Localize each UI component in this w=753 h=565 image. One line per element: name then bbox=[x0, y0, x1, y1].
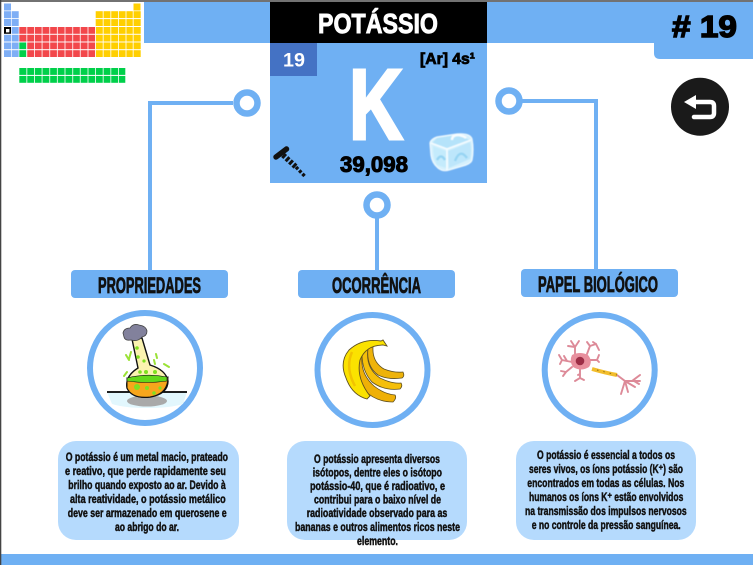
atomic number bbox=[270, 43, 317, 76]
heading: papel biologico bbox=[521, 269, 678, 297]
icon: reacting flask bbox=[90, 313, 200, 423]
description: papel biologico: na transmissão dos impulsos nervosos bbox=[525, 506, 687, 518]
description: papel biologico: O potássio é essencial a todos os bbox=[537, 450, 675, 462]
icon: bananas bbox=[318, 315, 428, 425]
description: papel biologico: e no controle da pressão sanguínea. bbox=[532, 520, 681, 532]
icon: neuron bbox=[545, 315, 655, 425]
description: ocorrencia: potássio-40, que é radioativo, e bbox=[310, 481, 445, 493]
heading: propriedades: PROPRIEDADES bbox=[98, 273, 201, 298]
atomic number: 19 bbox=[283, 50, 305, 72]
description: propriedades: deve ser armazenado em querosene e bbox=[68, 508, 227, 520]
description: propriedades: brilho quando exposto ao ar. Devido à bbox=[68, 480, 226, 492]
back button bbox=[671, 78, 729, 136]
description: papel biologico: seres vivos, os íons potássio (K⁺) são bbox=[529, 464, 683, 476]
connector: ocorrencia bbox=[366, 194, 388, 272]
panel: papel biologico bbox=[516, 269, 696, 540]
description: ocorrencia: radioatividade observado para as bbox=[307, 508, 447, 520]
description: ocorrencia: bananas e outros alimentos ricos neste bbox=[295, 522, 460, 534]
description: propriedades: alta reatividade, o potássio metálico bbox=[70, 494, 226, 506]
description: ocorrencia: elemento. bbox=[357, 536, 398, 548]
description: ocorrencia: isótopos, dentre eles o isótopo bbox=[313, 468, 442, 480]
heading: papel biologico: PAPEL BIOLÓGICO bbox=[538, 272, 658, 297]
panel: ocorrencia bbox=[287, 270, 467, 548]
icon: solid state screw bbox=[276, 149, 306, 177]
footer band bbox=[0, 554, 753, 565]
periodic table locator bbox=[4, 4, 141, 83]
heading: propriedades bbox=[71, 270, 228, 298]
heading: ocorrencia bbox=[298, 270, 455, 298]
description: papel biologico: humanos os íons K⁺ estão envolvidos bbox=[529, 492, 683, 504]
title bbox=[270, 2, 487, 43]
heading: ocorrencia: OCORRÊNCIA bbox=[332, 273, 421, 298]
atomic mass: 39,098 bbox=[340, 152, 408, 177]
header band bbox=[144, 2, 753, 43]
electron configuration: [Ar] 4s¹ bbox=[420, 51, 475, 68]
description: ocorrencia bbox=[287, 441, 467, 548]
connector: propriedades bbox=[150, 92, 258, 272]
description: ocorrencia: O potássio apresenta diversos bbox=[314, 454, 440, 466]
title: POTÁSSIO bbox=[318, 8, 438, 39]
element card bbox=[270, 2, 487, 183]
element symbol: K bbox=[349, 49, 403, 161]
icon: ice cube bbox=[430, 134, 473, 171]
page number tab bbox=[654, 9, 753, 59]
description: papel biologico bbox=[516, 441, 696, 540]
connector: papel biologico bbox=[498, 90, 596, 271]
description: propriedades bbox=[58, 441, 239, 540]
element number: # 19 bbox=[672, 9, 737, 44]
description: ocorrencia: contribui para o baixo nível de bbox=[314, 494, 441, 506]
panel: propriedades bbox=[58, 270, 239, 540]
description: propriedades: O potássio é um metal macio, prateado bbox=[66, 452, 228, 464]
description: propriedades: e reativo, que perde rapidamente seu bbox=[65, 466, 226, 478]
description: papel biologico: encontrados em todas as células. Nos bbox=[527, 478, 684, 490]
description: propriedades: ao abrigo do ar. bbox=[115, 522, 179, 534]
